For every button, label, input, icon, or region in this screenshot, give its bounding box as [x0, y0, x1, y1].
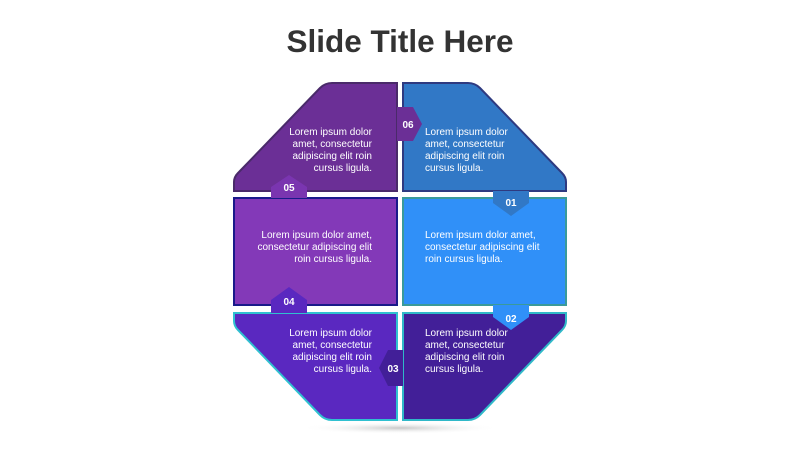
badge 04 [271, 287, 307, 313]
badge 02 [493, 305, 529, 330]
panel: bottom-left: adipiscing elit roin [292, 352, 372, 363]
panel: bottom-right: amet, consectetur [425, 340, 505, 351]
title: Slide Title Here [286, 23, 514, 59]
badge 01 [493, 191, 529, 216]
panel: middle-right [403, 198, 566, 305]
panel: middle-right: Lorem ipsum dolor amet, [425, 230, 536, 241]
panel: top-right: adipiscing elit roin [425, 151, 504, 162]
shadow [300, 422, 500, 434]
panel: bottom-left [234, 313, 397, 420]
panel: middle-right: consectetur adipiscing elit [425, 242, 540, 253]
panel: middle-left [234, 198, 397, 305]
badge 04: 04 [283, 297, 295, 308]
panel: bottom-left: cursus ligula. [314, 364, 372, 375]
badge 02: 02 [505, 314, 517, 325]
panel: middle-left: Lorem ipsum dolor amet, [261, 230, 372, 241]
panel: top-left: adipiscing elit roin [292, 151, 372, 162]
panel: bottom-right: adipiscing elit roin [425, 352, 504, 363]
badge 06 [397, 107, 422, 141]
panel: top-right [403, 83, 566, 191]
badge 03: 03 [387, 364, 399, 375]
badge 05: 05 [283, 183, 295, 194]
badge 05 [271, 175, 307, 198]
panel: bottom-right: cursus ligula. [425, 364, 483, 375]
badge 03 [379, 350, 403, 386]
panel: top-right: amet, consectetur [425, 139, 505, 150]
panel: top-left [234, 83, 397, 191]
panel: top-left: cursus ligula. [314, 163, 372, 174]
panel: top-right: cursus ligula. [425, 163, 483, 174]
panel: bottom-left: amet, consectetur [293, 340, 373, 351]
panel: top-right: Lorem ipsum dolor [425, 127, 508, 138]
panel: bottom-right [403, 313, 566, 420]
panel: middle-left: roin cursus ligula. [294, 254, 372, 265]
panel: bottom-left: Lorem ipsum dolor [289, 328, 373, 339]
badge 06: 06 [402, 120, 414, 131]
panel: top-left: Lorem ipsum dolor [289, 127, 373, 138]
panel: middle-right: roin cursus ligula. [425, 254, 503, 265]
panel: top-left: amet, consectetur [293, 139, 373, 150]
panel: bottom-right: Lorem ipsum dolor [425, 328, 508, 339]
panel: middle-left: consectetur adipiscing elit [257, 242, 372, 253]
badge 01: 01 [505, 198, 517, 209]
